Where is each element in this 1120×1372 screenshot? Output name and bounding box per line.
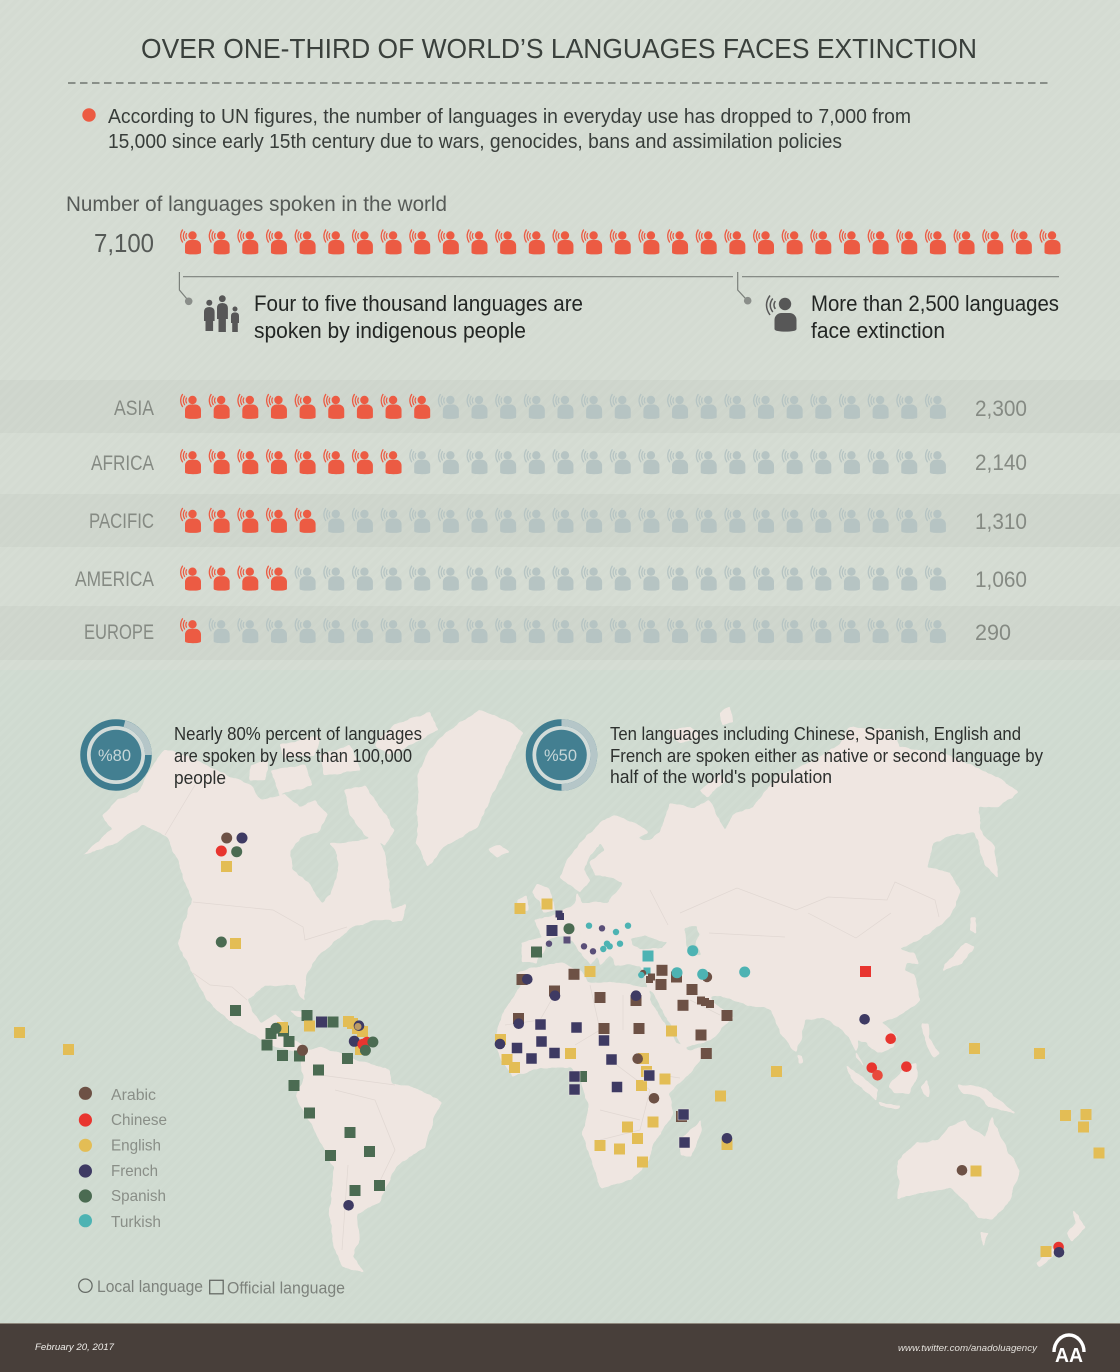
pictogram row: world total (181, 230, 1060, 254)
legend: languages: Arabic (111, 1087, 156, 1104)
legend: languages: Spanish (111, 1188, 166, 1205)
legend: languages: Chinese (111, 1112, 167, 1129)
map markers: Americas (14, 832, 385, 1211)
row: Europe: EUROPE (84, 621, 154, 644)
text: 80 percent: Nearly 80% percent of languages (174, 724, 422, 744)
text: 80 percent (174, 724, 422, 788)
row: Asia (114, 394, 1027, 421)
connector: extinction (738, 272, 1059, 305)
row: Pacific: PACIFIC (89, 510, 154, 533)
text: indigenous languages: spoken by indigenous people (254, 318, 526, 343)
map markers: Asia and Oceania (771, 966, 1104, 1258)
heading: number of languages: Number of languages spoken in the world (66, 193, 447, 216)
text: 50 percent (610, 724, 1043, 787)
footer: www.twitter.com/anadoluagency (898, 1343, 1038, 1354)
row: Africa (91, 449, 1027, 475)
legend: languages: Turkish (111, 1214, 161, 1231)
title: OVER ONE-THIRD OF WORLD’S LANGUAGES FACES EXTINCTION (141, 33, 977, 64)
text: 80 percent: are spoken by less than 100,000 (174, 746, 412, 766)
text: 50 percent: Ten languages including Chinese, Spanish, English and (610, 724, 1021, 744)
intro text: According to UN figures, the number of languages in everyday use has dropped to 7,000 from (108, 106, 911, 128)
text: extinction (811, 291, 1059, 343)
map markers: Africa (495, 1013, 732, 1168)
legend: languages: English (111, 1137, 161, 1154)
legend: marker shapes: Official language (227, 1278, 345, 1298)
row: America: 1,060 (975, 567, 1027, 592)
legend: marker shapes: Local language (97, 1277, 203, 1296)
footer: February 20, 2017 (35, 1342, 115, 1353)
icon: family (204, 295, 239, 332)
row: Asia: ASIA (114, 397, 154, 420)
donut: 50 percent (529, 723, 594, 787)
row: Europe: 290 (975, 620, 1011, 645)
donut: 80 percent: %80 (98, 746, 131, 765)
row: Europe (84, 618, 1011, 645)
text: 50 percent: French are spoken either as native or second language by (610, 746, 1043, 766)
text: extinction: More than 2,500 languages (811, 291, 1059, 316)
legend: languages: French (111, 1163, 158, 1180)
row: Pacific (89, 508, 1027, 534)
legend: marker shapes (79, 1277, 345, 1298)
text: indigenous languages: Four to five thousand languages are (254, 291, 583, 316)
donut: 80 percent (84, 723, 148, 787)
world map (83, 708, 1085, 1272)
donut: 50 percent: %50 (544, 746, 577, 765)
row: America: AMERICA (75, 568, 154, 591)
row: Pacific: 1,310 (975, 509, 1027, 534)
icon: AA logo (1054, 1335, 1084, 1367)
text: 50 percent: half of the world's population (610, 767, 832, 787)
text: 80 percent: people (174, 768, 226, 788)
total value: 7,100 (94, 228, 154, 258)
row: America (75, 566, 1027, 592)
row: Asia: 2,300 (975, 396, 1027, 421)
intro text: 15,000 since early 15th century due to wars, genocides, bans and assimilation policies (108, 131, 842, 153)
connector: indigenous (179, 272, 733, 305)
footer (0, 1323, 1120, 1372)
text: extinction: face extinction (811, 318, 945, 343)
row: Africa: 2,140 (975, 450, 1027, 475)
icon: AA logo: AA (1055, 1345, 1083, 1367)
legend: languages (79, 1087, 167, 1231)
text: indigenous languages (254, 291, 583, 343)
icon: speaker (766, 296, 796, 332)
row: Africa: AFRICA (91, 452, 154, 475)
intro text (82, 106, 911, 153)
map markers: Europe and Middle East (514, 898, 750, 1021)
